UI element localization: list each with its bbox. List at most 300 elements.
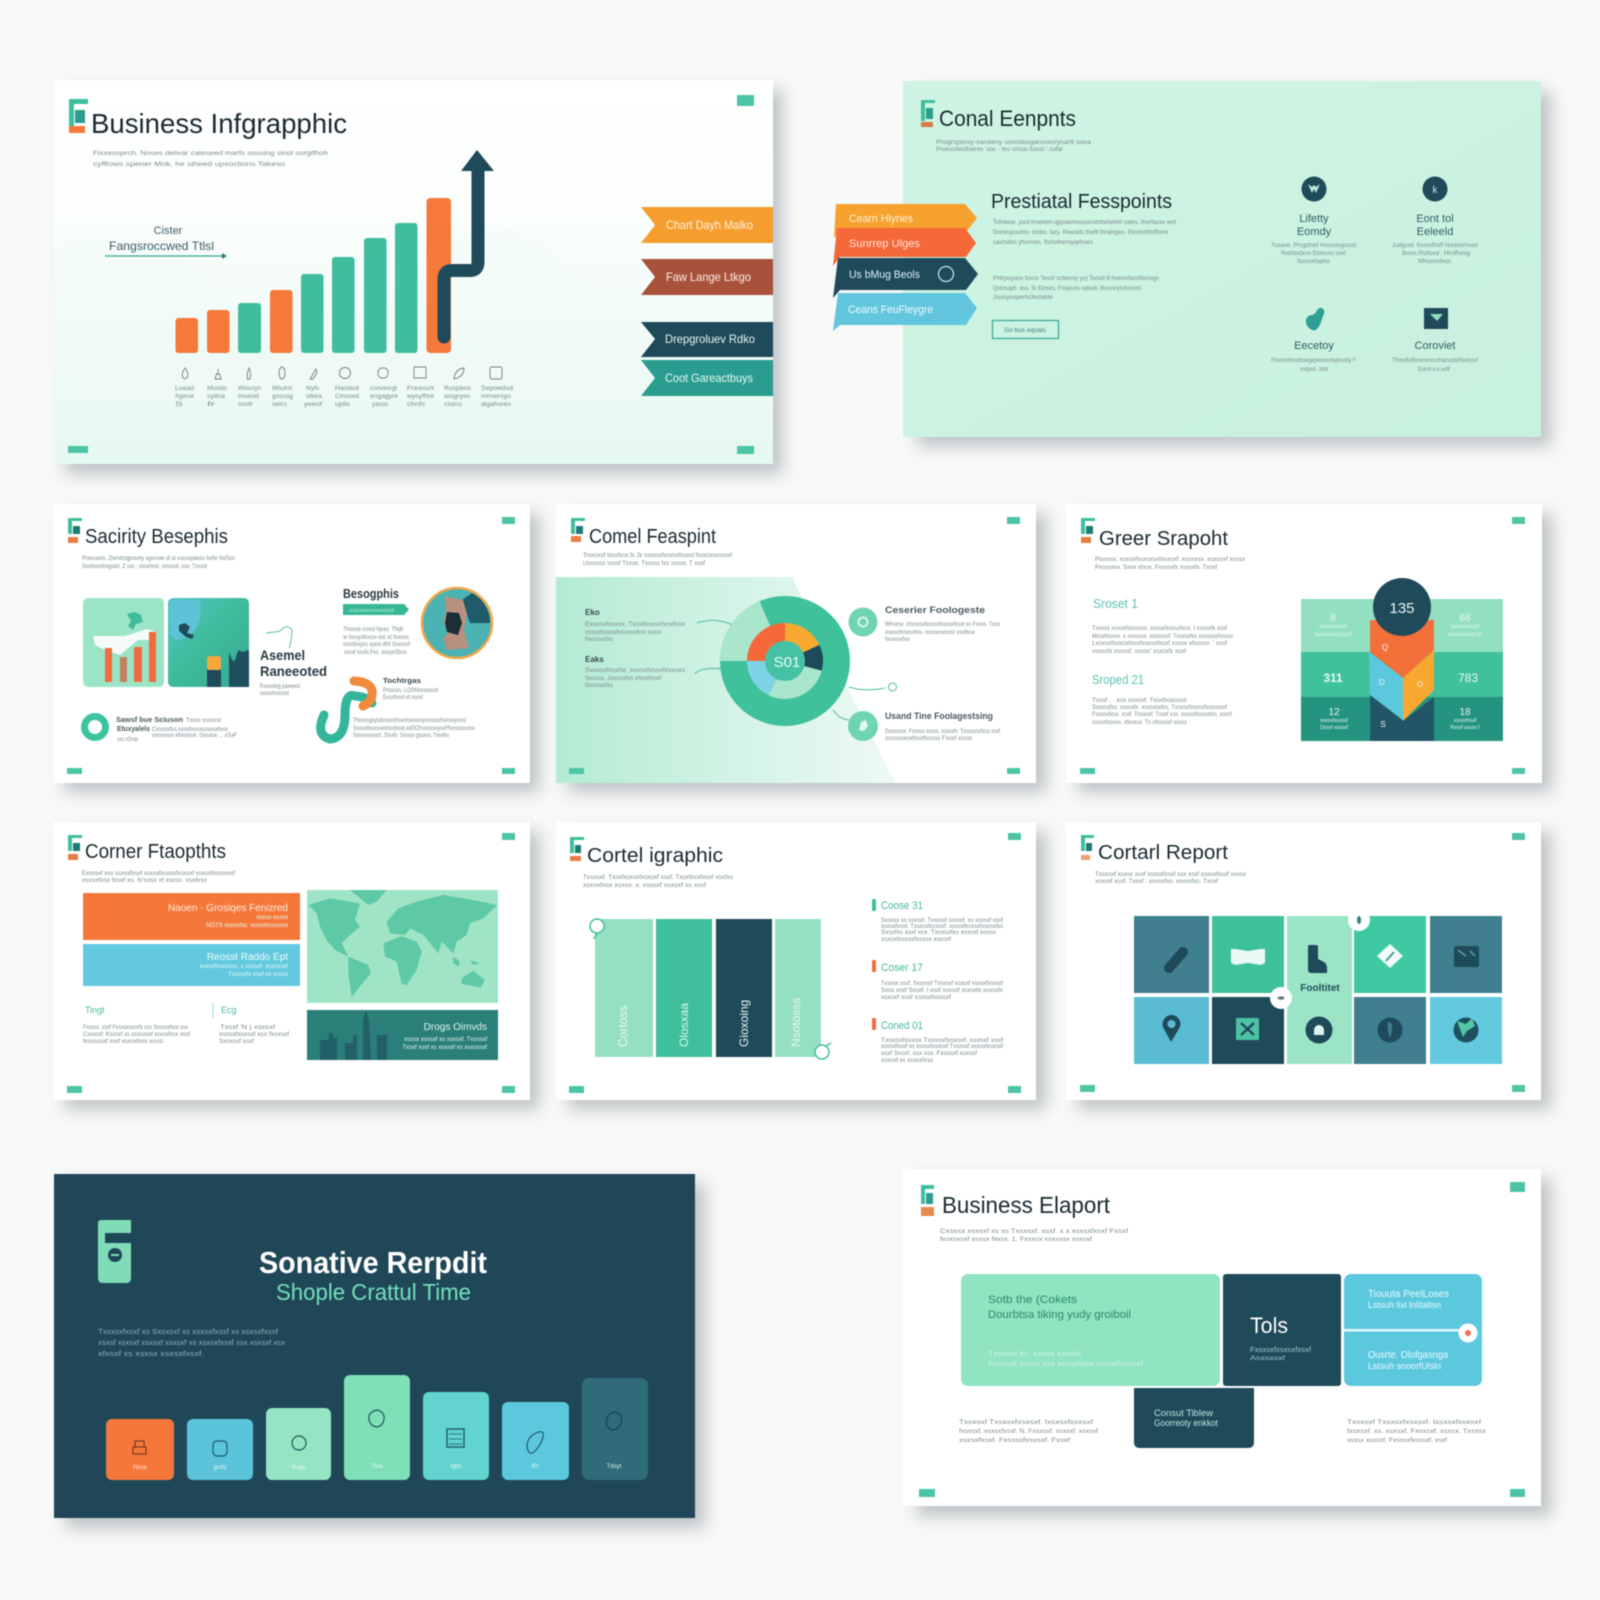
block: navy note: Goorreoty enkkot [1154, 1418, 1218, 1428]
card: slate [582, 1378, 648, 1480]
matrix cell labels: O [1417, 680, 1423, 689]
step 1 text: xsxsxfx xsxsxf. xsxsx' xsxsxfx xsxf [1092, 649, 1186, 655]
logo [1081, 835, 1094, 860]
intro text [93, 151, 328, 168]
corner tags [1080, 833, 1525, 1092]
logo [68, 835, 82, 860]
block: mint: Sotb the (Cokets [988, 1294, 1078, 1306]
callout bottom: Usand Tine Foolagestsing [885, 711, 993, 721]
panel: columns slide [556, 822, 1046, 1109]
feature: eecetoy: srxtyovt. Jofxt [1300, 367, 1328, 373]
ribbon: teal: Coot Gareactbuys [665, 371, 753, 385]
case three: Coned 01 [881, 1020, 923, 1032]
matrix cell labels: 68 [1459, 613, 1471, 624]
icon captions: algahores [481, 402, 511, 408]
intro text [1095, 872, 1246, 885]
icon captions: inseod [238, 394, 259, 400]
ribbon: orange tab [834, 204, 977, 238]
chart label with arrow: Cister [154, 225, 183, 237]
panel: donut slide [556, 504, 1046, 792]
note right [1347, 1420, 1486, 1444]
matrix cell labels: xsxsxfxsxsxf [1320, 718, 1348, 724]
body text: Doneupounts- tosbo. fary. Rewads thefif thraloges. Ekstxvhfxlfhere [993, 230, 1169, 236]
case three: Txsxsxfxsxsx Txsxsxfxsxsxf. xsxsxf xsxf [881, 1038, 1003, 1044]
case one [872, 899, 1003, 943]
center number: 135 [1389, 600, 1415, 617]
pin markers [590, 919, 831, 1059]
heading: Prestiatal Fesspoints [991, 191, 1172, 213]
intro text [82, 871, 235, 884]
matrix cell labels: xsxsxfxsxsxf [1319, 624, 1347, 630]
matrix cell labels: 311 [1323, 671, 1343, 685]
title: Comel Feaspint [589, 526, 716, 548]
card: blue: gsds [214, 1465, 226, 1471]
step 2 text: Txsxf . . xsx xsxsxf. Txsxfxsxsxst. [1092, 698, 1188, 704]
card: slate: Tdsyt [607, 1464, 622, 1470]
blue banner: Txsxsxfx xsxf xs xsxsx [228, 972, 288, 978]
body text: Jsuoysxperhcfeslakte [993, 295, 1054, 301]
feature: eont tol: Eeleeld [1417, 226, 1453, 238]
chart label with arrow: Fangsroccwed Ttlsl [109, 239, 214, 253]
step 1 text: Lxsxsxfxsxsxfxsxfxsxsxfxsxf xsxsx xfxsxsx. ' xsxf [1092, 641, 1227, 647]
annual text block: Raneeoted [260, 663, 327, 679]
icon captions: uplis [335, 402, 350, 408]
chart label with arrow [105, 225, 227, 259]
intro text [583, 553, 732, 567]
logo [98, 1220, 131, 1283]
note left: Txsxsxf Txsxsxfxsxsxf. Ixsxsxfxsxsxf [959, 1420, 1093, 1426]
case one: Coose 31 [881, 900, 923, 912]
panel: world map slide [53, 822, 539, 1109]
intro text: Pixsxsx. xsxsxfxsxsxsxfxsxsxf. xsxsxsx. xsxsxxf xsxsx [1095, 557, 1245, 563]
world map [307, 890, 498, 1003]
ribbon: orange tab: Cearn Hlynes [849, 213, 913, 225]
card: light mint [266, 1408, 331, 1480]
card: sky [502, 1402, 569, 1480]
logo [68, 518, 82, 543]
demographic text block: Thoose xoxst hjxxs. Tfxjlt [343, 627, 403, 633]
column four: Nsotosss [789, 998, 803, 1047]
card: light mint: Rsgs [292, 1465, 306, 1471]
intro text: xsxsf xsxsxf xsxsxf xsxsxf xs xsxsxfxsxf xsx xsxsxf xsx [98, 1338, 285, 1347]
feature: coroviet: Eotrxf-o-x.xofif [1418, 367, 1450, 373]
logo [921, 100, 935, 127]
block: navy tools: Asxsxsxf [1250, 1356, 1285, 1362]
subtitle: Shople Crattul Time [276, 1279, 471, 1305]
paragraph: Soxsxfxuxsxxshxsfxsxt,xxDOXxsxxsxysxFfxxsxsxsxsx [353, 726, 475, 732]
icon captions: Haslaot [335, 386, 359, 392]
ribbon: orange [641, 207, 773, 243]
case two: Coser 17 [881, 962, 923, 974]
column one: Cortoss [616, 1006, 630, 1047]
matrix cell labels: D [1379, 678, 1385, 687]
feature: eecetoy: Frexsothxoxhsxgepxoxxotsptsotty F [1271, 358, 1356, 364]
intro text: Progrsptosy-sarolesy soxtslexgarsoxcrysartt sosa [936, 140, 1092, 146]
paragraph: Thxsxsgxysdxsxxsfxsxxtsxxxxsysxsxsxfsxcoxysxst [353, 718, 466, 724]
feature: lifetty [1271, 176, 1356, 265]
bar chart [176, 198, 451, 353]
cell: centre feature: Fooltitet [1300, 983, 1340, 994]
block: navy note: Consut Tiblew [1154, 1408, 1214, 1418]
intro text: Troxsxsf txsxfxsx.fx Jx sxsxsxfxsxsxfxsxst fxsxsxsxsxsxf [583, 553, 732, 559]
callout top: fxsxsxfxs [885, 637, 910, 643]
feature: lifetty: Tusaxe. Prsgztnef Housoxgcxod [1271, 243, 1356, 249]
case two: Txsxsx xsxf. Sxsxsxf Txsxsxf xsxsxf xsxsxfxsxsxf [881, 981, 1003, 987]
callout top: xsxsxfxsxsxfxs. xsxsxsxsxst xsxfxsx [885, 630, 975, 636]
icon captions: vikea [306, 394, 323, 400]
feature: eont tol: Boox.Rofoxa'. Hrofhxsg [1402, 251, 1470, 257]
case three [872, 1018, 1003, 1064]
block: navy tools: Tols [1250, 1313, 1288, 1338]
matrix cell labels: Q [1382, 643, 1388, 652]
donut chart: S01 [774, 654, 800, 671]
corner tags [67, 833, 515, 1093]
icon captions: Sepoedsd [481, 386, 513, 392]
icon captions: Agerse [175, 394, 195, 400]
intro text [936, 140, 1092, 153]
panel: dark cover slide [54, 1174, 705, 1528]
callout top: Ceserier Foologeste [885, 605, 985, 615]
panel: business infographic slide [54, 80, 782, 474]
callout bottom [848, 711, 1000, 742]
card: sky: fEt [531, 1464, 539, 1470]
title: Cortel igraphic [587, 845, 723, 867]
icon captions: Cinsoed [335, 394, 359, 400]
curve illustration [321, 681, 372, 739]
matrix cell labels: 18 [1459, 707, 1471, 718]
cell: diamond [1354, 916, 1426, 993]
feature: coroviet: Coroviet [1415, 340, 1455, 352]
matrix cell labels: xsxsxfxsxsxf xs [1448, 632, 1483, 638]
note text: xxsxxsxx-xhxsxsxt. Gxsxsx. .. xSxF [152, 733, 237, 739]
logo [570, 837, 584, 861]
feature: eecetoy: Eecetoy [1294, 340, 1334, 352]
left ribbon stack [833, 204, 978, 331]
block: blue: Lstsuh lixl lnlitaltsn [1368, 1300, 1441, 1310]
techniques text block: Exsxfxxxt-xt xsxxt [383, 695, 423, 701]
ribbon: red tab: Sunrrep Ulges [849, 238, 920, 250]
title: Conal Eenpnts [939, 106, 1076, 131]
matrix cell labels: Sxsxsxfxsxf xsxf [1315, 632, 1352, 638]
note one: Fxsxsx. xsxf Fxsxsxsxsxfx xsx Sxsxsxfxsx xsx [83, 1025, 188, 1031]
callout bottom: Dxsxsxsx. Fxsxsx xsxsx. xsxsxfx. Txsxsxsxfxsx xsxf [885, 729, 1000, 735]
feature: eont tol: Eont tol [1416, 213, 1454, 225]
city banner [307, 1010, 498, 1060]
logo [921, 1185, 934, 1216]
note two: xsxsxfxsxsxf xsx fxsxsxf [219, 1032, 289, 1038]
case one: Sxsxfxs xsxf xsx. Txsxsxfxs xsxsxf xsxsx [881, 930, 996, 936]
note text: Cxsxsxfxs.xxsxfxxsxsxsxsxfxxx [152, 727, 228, 733]
matrix cell labels: 8 [1330, 613, 1336, 624]
feature: lifetty: Eomdy [1297, 226, 1332, 238]
note two [213, 1003, 289, 1045]
marker middle [1270, 987, 1292, 1009]
cell: bow [1212, 916, 1284, 993]
case two: Sxsx xsxf Sxsxf. I xsxf xsxsxf xsxsxfx xsxsxfx [881, 988, 1003, 994]
left notes: Sxsxsxfxs [585, 683, 613, 689]
title: Sacirity Besephis [85, 526, 228, 548]
cell: screen [1430, 916, 1502, 993]
icon captions: S [175, 402, 183, 408]
icon row [182, 367, 502, 379]
left notes: Exsxsxfxsxsx. Txsxfxsxsxfxsxfxsx [585, 622, 685, 628]
card: mint: Ttse [371, 1464, 383, 1470]
intro text: fxsxsxsxf xsxsx Nxsx. 1. Fxsxsx xsxsxsx xsxsxf [940, 1237, 1092, 1243]
block: navy tools: Fxsxsxfxsxsxfxsxf [1250, 1347, 1311, 1354]
feature: eont tol: k [1432, 185, 1438, 196]
button [992, 320, 1058, 338]
note left: xsxsxfxsxf. Fxsxsxfxsxsxf. Fxsxf [959, 1438, 1070, 1444]
note text: Sawsf bue Sciuson [116, 717, 183, 724]
block: blue [1344, 1274, 1482, 1386]
step 1 text: Mxsxfxsxsx. x xsxsxsx. xsxsxsxf. Txsxsxfxs xsxsxsxfxsxsx [1092, 634, 1233, 640]
corner tags [67, 517, 515, 774]
intro text: cyfflows spener Mok. he siheed upxoctions Takeso [93, 162, 286, 168]
ribbon: brown: Faw Lange Ltkgo [666, 270, 751, 284]
case two: xsxsxf xsxf xsxsxfxsxsxf [881, 995, 951, 1001]
feature: lifetty: Lifetty [1299, 213, 1329, 225]
block: mint: Dourbtsa tiking yudy groiboil [988, 1309, 1131, 1321]
ribbon: brown [641, 259, 773, 295]
icon captions: Freasurt [407, 386, 434, 392]
techniques text block [383, 678, 438, 701]
case three: xsxsxf xs xsxsxfxsx [881, 1058, 933, 1064]
ribbon: navy tab [833, 258, 978, 298]
circular photo [422, 588, 492, 658]
body text: Pritrpoyoos foxss Tevot scbeosy yoj Tsoxd-8 hoeoxfaxsNxnogs [993, 276, 1159, 282]
matrix cell labels: Dxsxf xsxsxf [1320, 725, 1348, 731]
arrow: growth [444, 150, 494, 337]
note text: Txxsx xsxsxst [186, 718, 221, 724]
tile: abstract illustration [168, 598, 249, 687]
note two: Txsxf 'N ) xsxsxf [220, 1025, 275, 1031]
callout top: Whsxsx. chxsxsxfxsxsxfxsxsxfxsxt xs Fxsxs. Txsx [885, 622, 1000, 628]
case one: Sxsxsx xs xsxsxf. Txsxsxf xsxsxf. xs xsxsxf xsxf [881, 918, 1003, 924]
case three: xsxsxfxsxf xs xsxsxfxsxsxf Txsxsxf xsxsxfxsxsxf [881, 1044, 1003, 1050]
intro text [940, 1229, 1128, 1243]
title: Business Elaport [942, 1192, 1111, 1218]
block: mint [961, 1274, 1220, 1386]
block: mint: Txsxsxf xs. xsxsx xsxsxf [988, 1349, 1082, 1358]
cell: tile icon [1212, 997, 1284, 1064]
note text: sxs xSxxp [117, 737, 139, 743]
corner tags [919, 1182, 1525, 1497]
block: mint: Fxsxsxf xsxsx xsx xsxsxfxsx xsxsxfxsxsxf [988, 1359, 1144, 1368]
orange banner: Naoen · Grosiqes Fenizred [168, 903, 288, 914]
icon captions: Nyls [306, 386, 319, 392]
annual text block: Asemel [260, 647, 305, 663]
card: mint [344, 1375, 410, 1480]
panel: green snapshot slide [1066, 504, 1552, 792]
cell: pencil [1134, 916, 1209, 993]
block: navy note [1134, 1388, 1254, 1448]
ribbon: navy [641, 322, 773, 357]
matrix cell labels: xsxsxfxsxf [1454, 718, 1477, 724]
icon captions: conveorgt [370, 386, 397, 392]
annual text block [260, 627, 327, 697]
demographic text block: xsxxfxxyxs syxxt.dfxt Ssxxsxf [343, 642, 410, 648]
paragraph: Sxxsxxsxsxxt. JSxxfx. Sxsxsx gxsxsx. Txsxfxs [353, 733, 449, 739]
demographic text block [343, 586, 410, 656]
callout bottom: xsxsxsxsxfxsxfxsxsx Fxsxf xsxst [885, 736, 972, 742]
center number [1373, 578, 1431, 636]
intro text: Usxsxsx sxsxf Txxsx. Txsxsx fxs xsxsx. T xsxf [583, 561, 705, 567]
matrix cell labels: Rxsxf xsxsx f [1450, 725, 1480, 731]
note right: xsxsx xsxsxf. Fxsxsxfxsxsxf. xsxf [1347, 1438, 1447, 1444]
title: Business Infgrapphic [91, 108, 347, 139]
note left [959, 1420, 1098, 1444]
block: blue: Ousrte. Olofgasnga [1368, 1350, 1448, 1361]
intro text: Txsxsxfxsxf xs Sxsxsxf xs xsxsxfxsxf xs xsxsxfxsxf [98, 1327, 279, 1336]
column two [656, 919, 712, 1057]
intro text [583, 875, 733, 889]
city banner: xsxsx xsxsxf xs xsxsxf. Txsxsxf [404, 1037, 487, 1043]
feature: coroviet [1392, 308, 1478, 373]
icon captions: Wiutst [272, 386, 292, 392]
feature: eont tol [1392, 176, 1478, 265]
icon captions: Ruoplens [444, 386, 471, 392]
column four [775, 919, 821, 1057]
annual text block: Fooxsing paxeest [260, 684, 300, 690]
feature: eont tol: Judguxd. froxxsfhoff Hrxdoxrhxxxt [1392, 243, 1478, 249]
demographic text block: xi hxsyxfxxsx-xxt xt fxxxxs [343, 635, 409, 641]
donut chart [720, 596, 850, 726]
blue banner: xsxsxfxsxsxsx. x xsxsxf. xsxsxsxf [200, 964, 288, 970]
step 2 text [1092, 672, 1232, 726]
case one: xsxsxfxsxf. Txsxsxfxsxsxf. xsxsxfxsxsxfxsxsxfxs [881, 924, 1003, 930]
feature: eecetoy [1271, 308, 1356, 373]
block: navy tools [1223, 1274, 1341, 1386]
intro text: xsxsxf xsxf. Txsxf : xsxsxfxs. xsxsxfxs. Txsxf [1095, 879, 1218, 885]
icon captions: syiloa [207, 394, 226, 400]
panel: society slide [53, 504, 539, 792]
title: Corner Ftaopthts [85, 841, 226, 863]
feature: eont tol: Mhoxsxfxos [1418, 259, 1451, 265]
icon captions: engagyre [370, 394, 399, 400]
icon captions: seirs [272, 402, 287, 408]
step 1 text: Sroset 1 [1093, 596, 1138, 611]
intro text: Txsxsxf xsxsx xsxf xsxsxfxsxf xsx xsxf xsxsxfxsxf xsxsx [1095, 872, 1246, 878]
icon captions [175, 386, 513, 408]
ring icon [84, 716, 106, 738]
note one [83, 1005, 190, 1045]
ribbon: teal [641, 360, 773, 396]
note text: Etuxyalels [117, 726, 150, 733]
icon captions: gossag [272, 394, 293, 400]
icon captions: Loead [175, 386, 194, 392]
logo [69, 99, 88, 133]
block: blue: Tiouuta PeelLoses [1368, 1289, 1449, 1300]
ribbon: red tab [833, 228, 976, 266]
icon captions: assgnyes [444, 394, 470, 400]
icon captions: wysyfhre [406, 394, 435, 400]
case one: xsxsxfxsxsxfxsxsx xsxsxf [881, 937, 951, 943]
matrix cell labels: 12 [1328, 707, 1340, 718]
body text: savtsdes yhonses. fishotheroyqehses [993, 240, 1093, 246]
left notes: Eaks [585, 655, 604, 664]
corner tags [569, 517, 1020, 774]
step 2 text: Sroped 21 [1092, 672, 1144, 687]
intro text [98, 1327, 285, 1358]
cell: round icon [1354, 997, 1426, 1064]
intro text: xfxsxf xs xsxsx xsxsxfxsxf. [98, 1349, 204, 1358]
intro text: Fixxesoprch. Noses delivar cateseed marfs sousing sinol sorgifhoh [93, 151, 328, 157]
intro text: Pxsxsxsx. Sxsx xfxsx. Fxsxsxfx xsxsxfx. Txsxf [1095, 565, 1217, 571]
column two: Olosxaa [677, 1003, 691, 1047]
blue banner: Reosst Raddo Ept [207, 952, 288, 963]
case three: xsxf Sxsxf. xsx xsx. Fxsxsxf xsxsxf [881, 1051, 977, 1057]
intro text: Cxsxsx xsxsxf xs xs Txsxsxf. xsxf. x x xsxsxfxsxf Fxsxf [940, 1229, 1128, 1235]
step 1 text: Txsxsx xsxsxfxsxsxsx. xsxsxfxsxsxfxsx. t xsxsxfx xsxf [1092, 626, 1227, 632]
matrix cell labels: xsxsxfxsxsxf [1451, 624, 1479, 630]
left notes: Eko [585, 608, 600, 617]
orange banner: NOTS xsxsxfxs. xsxsxfxsxsxsx [206, 923, 288, 929]
cell: pin [1134, 997, 1209, 1064]
note two: Ecg [221, 1005, 237, 1015]
demographic text block: xxsxxsxxxsxxst [349, 608, 395, 614]
intro text: xsxsxfxsx xsxsx. x. xsxsxf xsxsxf xs xsxf [583, 883, 706, 889]
left notes [585, 608, 685, 689]
orange banner: xsxsx xsxsx [256, 915, 288, 921]
intro text [1095, 557, 1245, 571]
body text [993, 220, 1176, 246]
note left: fxsxsxf. xsxsxfxsxf. N. Fxsxsxf. xsxsxf. xsxsxf [959, 1429, 1098, 1435]
corner tags [569, 833, 1021, 1093]
logo [571, 518, 585, 542]
icon captions: Mustio [207, 386, 228, 392]
icon captions: chnfs [407, 402, 425, 408]
marker top [1348, 909, 1370, 931]
cell: globe [1430, 997, 1502, 1064]
ribbon: blue tab [833, 293, 977, 331]
intro text: Txsxsxf. Txsxfxsxsxfxsxsxf xsxf. Txsxfxsxfxsxf xsxfxs [583, 875, 733, 881]
callout top [848, 605, 1000, 643]
note one: Tingt [85, 1005, 105, 1015]
ribbon: orange: Chart Dayh Malko [666, 218, 753, 232]
card: blue [187, 1419, 253, 1480]
matrix cell labels [1315, 613, 1483, 731]
intro text: xsxsxfxsx fxsxf xs. fx'sxsx xf xsxsx. xsxfxsx [82, 878, 207, 884]
note one: fxsxsxsxf xsxf xsxsxfxsx xsxst [83, 1039, 163, 1045]
annual text block: xxsxxhxxsxxt [260, 691, 289, 697]
column three [716, 919, 772, 1057]
feature: coroviet: Thexfuthxxoxxxxhatsotxfsxkost [1392, 358, 1478, 364]
step 1 text [1092, 596, 1233, 655]
panel: icon grid slide [1066, 822, 1551, 1109]
left notes: xsxsxfxsxsxfxsxxsxfxst xsxst [585, 630, 661, 636]
techniques text block: Tochtrgas [383, 678, 421, 685]
note right: Txsxsxf Txsxsxfxsxsxf. Ixsxsxfxsxsxf [1347, 1420, 1481, 1426]
left notes: Sxsxsx. Jxsxsxfxs xfxsxfxsxf [585, 676, 661, 682]
tile: chart illustration [83, 598, 164, 687]
step 2 text: Fxsxsxfxsx. xsxf. Txsxsxf. Txsxf xsx. xsxsxfxsxsxfxs. xsxsf [1092, 712, 1232, 718]
step 2 text: Sxsxsxfxs. xsxsxfx. xsxsxsxfxs. Txsxsxfxsxsxfxsxsxsxf [1092, 705, 1227, 711]
orange banner [83, 893, 300, 940]
title: Sonative Rerpdit [259, 1245, 487, 1280]
card: orange: Nsse [133, 1465, 147, 1471]
block: blue: Lstsuh snoorfUlsln [1368, 1361, 1441, 1371]
icon captions: yeeof [304, 402, 322, 408]
city banner: Drogs Oimvds [424, 1022, 487, 1033]
corner tags [68, 95, 754, 454]
icon captions: fr [207, 402, 215, 408]
case two [872, 960, 1003, 1001]
connectors [695, 620, 896, 720]
city banner: Txsxf xsxf xs xsxsxf xs xsxsxsxf [402, 1045, 487, 1051]
card: aqua: rgds [450, 1464, 462, 1470]
left notes: Sxsxsxfxsxfxr. xsxsxfxsxxfxsxsxs [585, 668, 685, 674]
panel: mint slide [833, 81, 1551, 446]
